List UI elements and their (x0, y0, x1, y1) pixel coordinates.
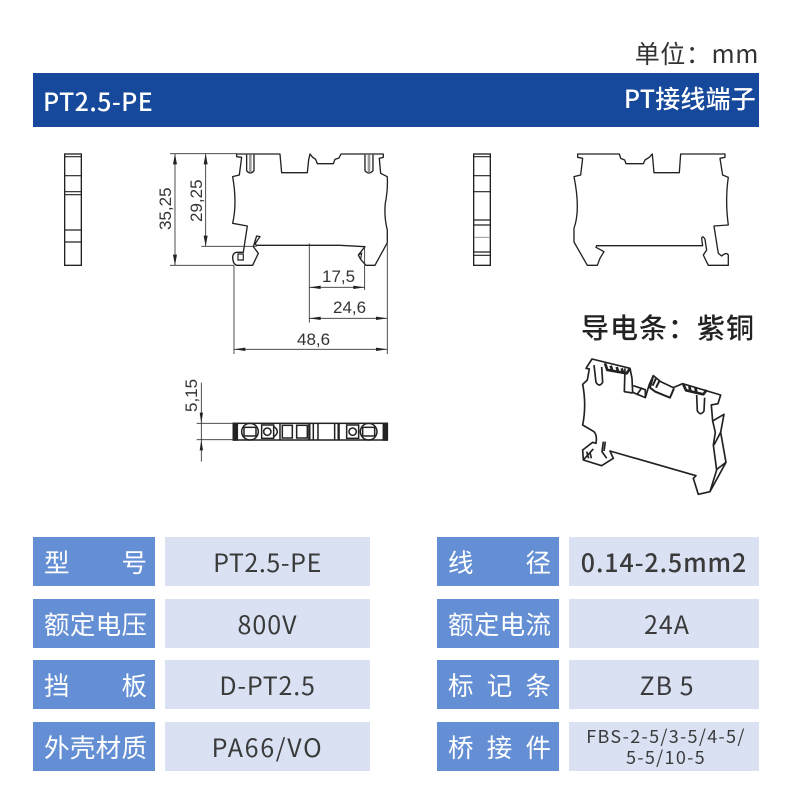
dimension 24,6: 24,6 (333, 298, 366, 317)
spec label: wire size (437, 537, 559, 586)
spec label: housing material: 材 (96, 728, 121, 765)
right side view drawing (474, 154, 490, 265)
bottom view drawing (197, 383, 387, 462)
spec label: marker strip: 条 (525, 666, 551, 703)
spec value: bridge (569, 722, 759, 771)
spec value: model: PT2.5-PE (213, 544, 322, 580)
spec label: rated voltage: 压 (121, 605, 147, 642)
product code: PT2.5-PE (43, 83, 153, 119)
spec value: housing material: PA66/VO (212, 729, 323, 765)
left clip circle (242, 423, 258, 440)
spec label: rated voltage: 定 (70, 605, 95, 642)
left pin slot (247, 155, 254, 173)
spec value: marker strip: ZB 5 (640, 667, 694, 703)
spec label: model (33, 537, 155, 586)
dimension 48,6: 48,6 (297, 330, 330, 349)
spec label: end plate (33, 660, 155, 709)
spec value: wire size: 0.14-2.5mm2 (581, 544, 747, 580)
spec label: rated voltage: 额 (44, 605, 70, 642)
unit label: 单位：mm (635, 35, 759, 71)
dimension 29,25: 29,25 (187, 179, 206, 222)
right square (347, 425, 359, 438)
spec label: rated current: 定 (474, 605, 499, 642)
spec value: rated voltage (165, 599, 370, 648)
spec label: rated current: 额 (448, 605, 474, 642)
copper conductor caption: 导电条：紫铜 (581, 307, 755, 347)
spec label: bridge: 件 (525, 728, 551, 765)
right side wall (710, 421, 726, 492)
spec label: housing material: 质 (121, 728, 147, 765)
front top left notch (624, 368, 645, 398)
spec value: wire size (569, 537, 759, 586)
spec label: model: 型 (44, 543, 70, 580)
spec label: rated current (437, 599, 559, 648)
spec value: rated current: 24A (644, 606, 690, 642)
spec value: end plate: D-PT2.5 (219, 667, 316, 703)
center bridge (650, 376, 674, 398)
spec label: housing material: 外 (44, 728, 70, 765)
spec value: end plate (165, 660, 370, 709)
dimension 17,5: 17,5 (322, 267, 355, 286)
right clip circle (360, 423, 377, 440)
spec value: rated current (569, 599, 759, 648)
spec label: bridge: 桥 (448, 728, 474, 765)
dimension lines (197, 383, 233, 462)
left square (262, 425, 274, 438)
product family: PT接线端子 (624, 80, 756, 116)
spec label: wire size: 线 (448, 543, 474, 580)
spec label: marker strip: 记 (487, 666, 512, 703)
isometric terminal drawing (583, 359, 726, 494)
terminal grid left (605, 363, 630, 374)
spec value: marker strip (569, 660, 759, 709)
plain front profile drawing (574, 154, 728, 265)
left side view drawing (65, 154, 81, 265)
spec label: bridge: 接 (487, 728, 512, 765)
right pin slot (365, 155, 373, 173)
spec value: bridge: 5-5/10-5 (626, 744, 706, 770)
terminal grid right (683, 384, 707, 394)
spec label: bridge (437, 722, 559, 771)
spec label: marker strip: 标 (448, 666, 474, 703)
top right pin (697, 395, 705, 414)
dimension 35,25: 35,25 (156, 187, 175, 230)
spec label: rated current: 电 (500, 605, 525, 642)
dimension lines (170, 154, 387, 354)
spec label: rated voltage (33, 599, 155, 648)
outline (583, 359, 726, 494)
spec label: rated voltage: 电 (96, 605, 121, 642)
dimensioned front profile drawing (233, 154, 387, 265)
body (233, 423, 387, 440)
spec label: model: 号 (121, 543, 147, 580)
foot details (583, 442, 607, 460)
foot detail (238, 253, 362, 260)
dimension 5,15: 5,15 (182, 379, 201, 412)
spec value: bridge: FBS-2-5/3-5/4-5/ (586, 723, 746, 749)
header bar (33, 73, 759, 127)
spec label: end plate: 挡 (44, 666, 70, 703)
spec value: model (165, 537, 370, 586)
spec label: housing material: 壳 (70, 728, 95, 765)
spec label: housing material (33, 722, 155, 771)
spec label: marker strip (437, 660, 559, 709)
terminal outline (233, 154, 387, 265)
middle squares (282, 425, 292, 438)
spec label: end plate: 板 (121, 666, 147, 703)
top left pin (594, 365, 603, 385)
spec value: rated voltage: 800V (237, 606, 298, 642)
spec label: wire size: 径 (525, 543, 551, 580)
spec label: rated current: 流 (525, 605, 551, 642)
spec value: housing material (165, 722, 370, 771)
